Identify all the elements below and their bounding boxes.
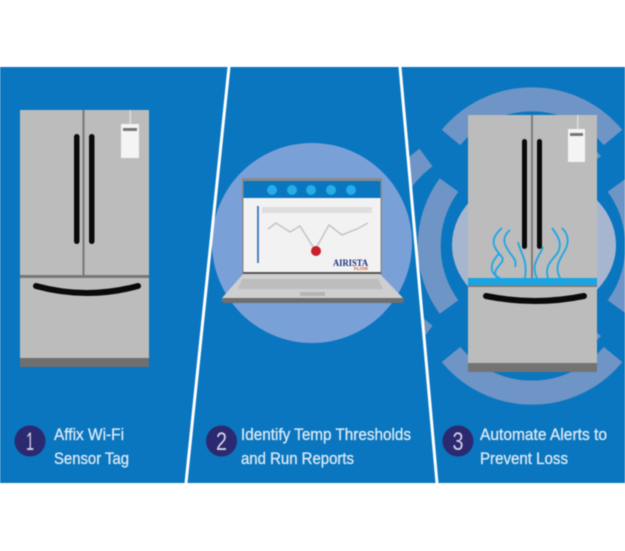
panel 2 glow circle	[212, 143, 412, 343]
step 2 label: and Run Reports	[241, 450, 354, 468]
infographic: three step refrigerator monitoring process	[0, 66, 625, 484]
blue background band	[0, 67, 625, 483]
divider: right	[400, 67, 437, 483]
step 3 label: Prevent Loss	[480, 450, 568, 468]
divider: left	[186, 67, 229, 483]
icon: refrigerator leaking cold air	[468, 115, 597, 372]
step 1 label: 1	[26, 428, 34, 456]
icon: refrigerator with sensor tag	[20, 110, 149, 367]
step 2 label: 2	[216, 428, 227, 456]
panel 3 alert rings	[381, 99, 625, 393]
icon: laptop with temperature chart: FLOW	[354, 266, 369, 271]
step 1 label: Affix Wi-Fi	[54, 426, 124, 444]
step 2 label: Identify Temp Thresholds	[241, 426, 411, 444]
step 1 label	[14, 426, 129, 468]
step 3 label	[442, 426, 607, 468]
icon: laptop with temperature chart	[221, 178, 404, 303]
step 2 label	[206, 426, 411, 468]
icon: laptop with temperature chart: AIRISTA	[333, 259, 368, 269]
step 1 label: Sensor Tag	[54, 450, 129, 468]
step 3 label: 3	[452, 428, 464, 456]
step 3 label: Automate Alerts to	[480, 426, 607, 444]
